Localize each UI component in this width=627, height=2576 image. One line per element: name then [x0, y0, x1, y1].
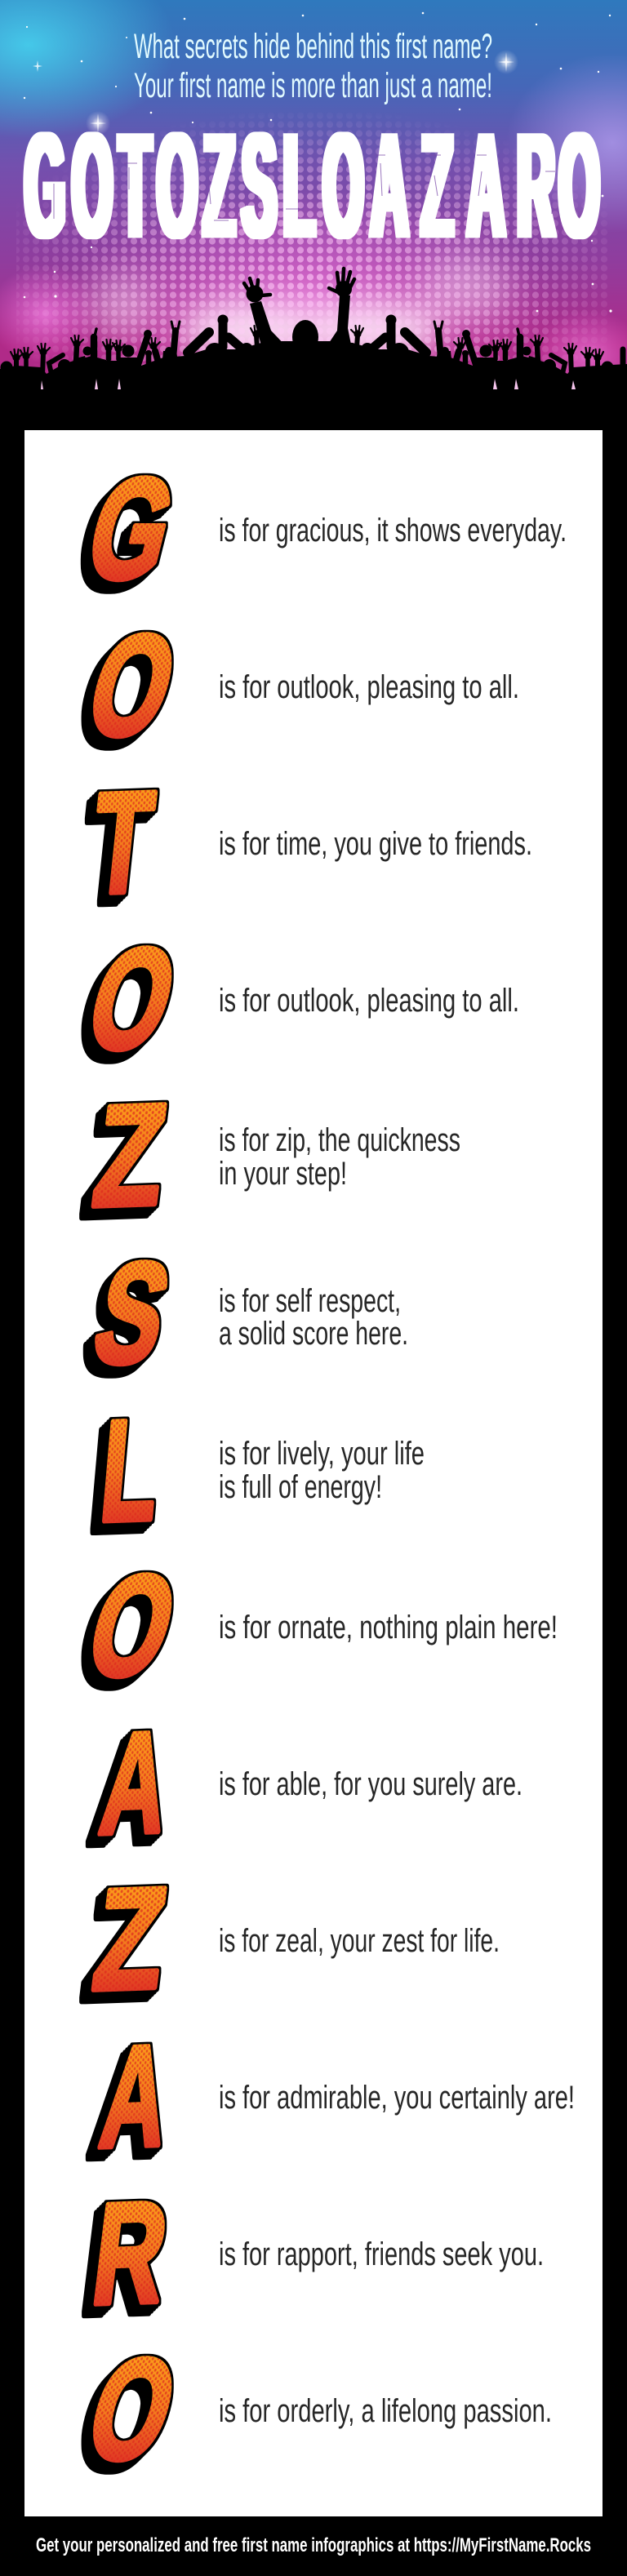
text S: a solid score here.	[219, 1316, 408, 1352]
row A	[93, 1703, 522, 1865]
header banner	[0, 0, 627, 430]
letter R: R	[85, 2171, 176, 2334]
row A	[93, 2016, 575, 2178]
letter A: A	[93, 1703, 177, 1865]
row R	[85, 2171, 544, 2334]
row G	[73, 450, 567, 609]
banner gradient background	[0, 0, 627, 416]
letter Z: Z	[87, 1074, 174, 1237]
text O: is for outlook, pleasing to all.	[219, 983, 519, 1019]
row S	[82, 1234, 408, 1393]
stage light dot grid	[16, 118, 607, 368]
letter L: L	[95, 1390, 165, 1552]
distress marks on title	[54, 155, 555, 220]
text L: is full of energy!	[219, 1469, 382, 1505]
letter O: O	[73, 1546, 191, 1706]
letter T: T	[86, 762, 160, 924]
text Z: in your step!	[219, 1156, 347, 1192]
row O	[73, 919, 519, 1079]
row Z	[87, 1858, 500, 2020]
letter O: O	[73, 606, 191, 766]
row O	[73, 1546, 558, 1706]
letter S: S	[82, 1234, 183, 1393]
row Z	[87, 1074, 460, 1237]
text Z: is for zip, the quickness	[219, 1122, 460, 1158]
letter A: A	[93, 2016, 177, 2178]
row L	[95, 1390, 425, 1552]
name title: GOTOZSLOAZARO	[24, 103, 599, 269]
text Z	[219, 1122, 460, 1192]
letter O: O	[73, 2330, 191, 2489]
text Z: is for zeal, your zest for life.	[219, 1923, 500, 1959]
letter O: O	[73, 919, 191, 1079]
crowd silhouette	[0, 269, 627, 430]
letter Z: Z	[87, 1858, 174, 2020]
white content panel	[24, 430, 603, 2516]
text L: is for lively, your life	[219, 1436, 425, 1472]
lead figure with raised hands	[244, 269, 354, 392]
small gaps of light in the crowd	[41, 379, 576, 389]
row T	[86, 762, 532, 924]
text S	[219, 1283, 408, 1352]
row O	[73, 606, 519, 766]
right edge raised fist	[620, 349, 625, 367]
text L	[219, 1436, 425, 1505]
letter G: G	[73, 450, 189, 609]
row O	[73, 2330, 552, 2489]
sparkles	[24, 12, 612, 313]
text S: is for self respect,	[219, 1283, 401, 1319]
text O: is for outlook, pleasing to all.	[219, 669, 519, 705]
